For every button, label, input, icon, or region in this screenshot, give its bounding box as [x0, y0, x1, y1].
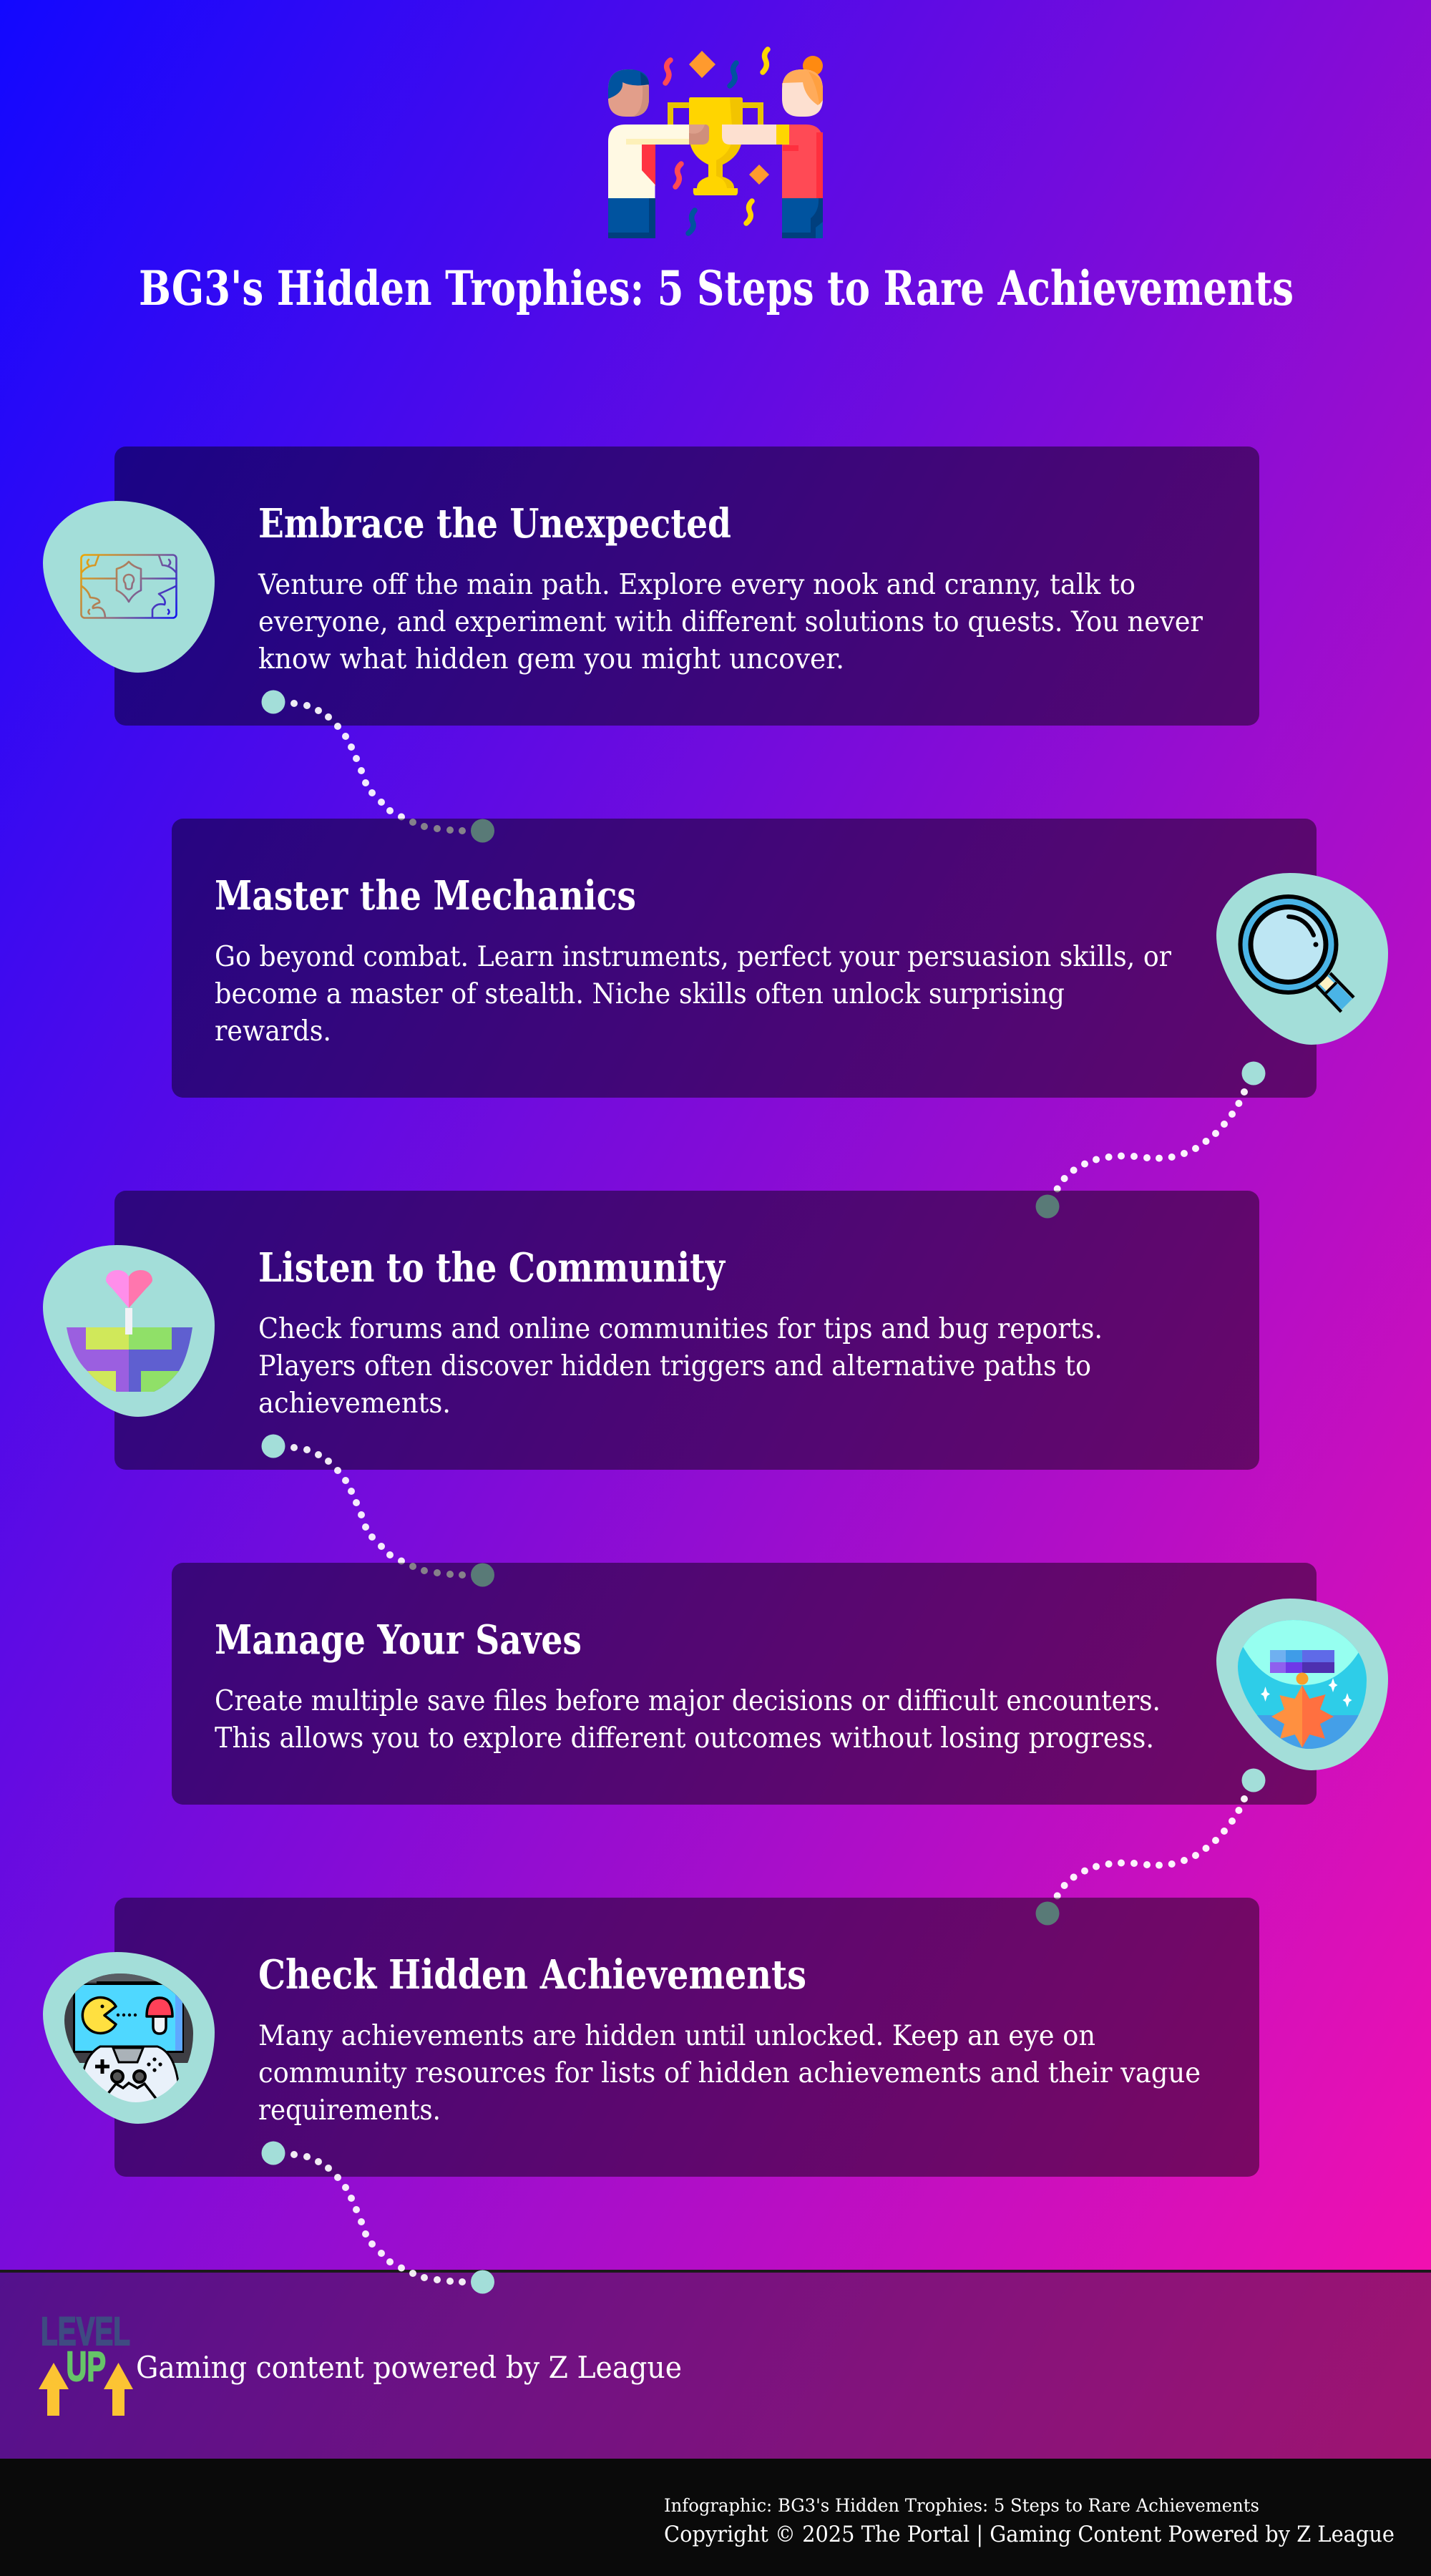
logo word: up: UP [66, 2343, 106, 2390]
infographic caption: Infographic: BG3's Hidden Trophies: 5 Steps to Rare Achievements [664, 2495, 1259, 2516]
connector: step 5 to footer [262, 2141, 494, 2294]
footer text: Gaming content powered by Z League [136, 2350, 682, 2385]
icon: heart lever bowl [67, 1270, 192, 1392]
card background [114, 1191, 1259, 1470]
heading: Check Hidden Achievements [258, 1951, 806, 1999]
body text: Players often discover hidden triggers and alternative paths to [258, 1350, 1091, 1382]
body text [215, 1685, 1161, 1755]
body text [215, 941, 1171, 1048]
heading: Manage Your Saves [215, 1616, 582, 1664]
connector: step 2 to step 3 [1036, 1062, 1265, 1218]
body text [258, 569, 1203, 675]
icon: magnifying glass [1238, 894, 1354, 1012]
body text: This allows you to explore different outcomes without losing progress. [215, 1722, 1154, 1755]
connector: step 3 to step 4 [262, 1434, 494, 1587]
card background [172, 819, 1317, 1098]
body text: Check forums and online communities for tips and bug reports. [258, 1313, 1103, 1345]
connector: step 4 to step 5 [1036, 1769, 1265, 1925]
body text: Many achievements are hidden until unlocked. Keep an eye on [258, 2020, 1095, 2052]
body text: Go beyond combat. Learn instruments, perfect your persuasion skills, or [215, 941, 1171, 973]
icon: game console and controller [64, 1974, 193, 2111]
body text: know what hidden gem you might uncover. [258, 643, 844, 675]
copyright line: Copyright © 2025 The Portal | Gaming Content Powered by Z League [664, 2522, 1395, 2547]
panel: step 3 [114, 1191, 1259, 1470]
panel: step 5 [114, 1898, 1259, 2177]
icon: trophy and two players [608, 49, 823, 238]
card background [172, 1563, 1317, 1805]
body text: achievements. [258, 1387, 451, 1420]
body text: become a master of stealth. Niche skills often unlock surprising [215, 978, 1065, 1010]
footer band [0, 2270, 1431, 2459]
connector: step 1 to step 2 [262, 690, 494, 843]
right player [782, 125, 823, 198]
blob: step 3 [43, 1245, 215, 1417]
body text: community resources for lists of hidden achievements and their vague [258, 2057, 1201, 2089]
body text: everyone, and experiment with different solutions to quests. You never [258, 606, 1203, 638]
body text: requirements. [258, 2094, 441, 2127]
left player [642, 143, 655, 186]
arrow left [39, 2363, 69, 2416]
body text: Venture off the main path. Explore every nook and cranny, talk to [258, 569, 1135, 601]
blob: step 2 [1216, 873, 1388, 1045]
body text: rewards. [215, 1015, 331, 1048]
body text [258, 1313, 1103, 1420]
card background [114, 1898, 1259, 2177]
body text [258, 2020, 1201, 2127]
heading: Listen to the Community [258, 1244, 726, 1292]
logo: level up [39, 2308, 133, 2416]
arrow right [104, 2363, 133, 2416]
panel: step 2 [172, 819, 1317, 1098]
trophy [670, 105, 761, 125]
icon: medal [1238, 1620, 1367, 1751]
heading: Master the Mechanics [215, 872, 636, 919]
panel: step 4 [172, 1563, 1317, 1805]
blob: step 5 [43, 1952, 215, 2124]
icon: treasure chest [82, 555, 176, 618]
blob: step 4 [1216, 1599, 1388, 1770]
bottom copyright bar [0, 2459, 1431, 2576]
card background [114, 447, 1259, 726]
body text: Create multiple save files before major decisions or difficult encounters. [215, 1685, 1161, 1717]
blob: step 1 [43, 501, 215, 673]
panel: step 1 [114, 447, 1259, 726]
logo word: level: LEVEL [41, 2308, 130, 2353]
heading: Embrace the Unexpected [258, 500, 731, 547]
